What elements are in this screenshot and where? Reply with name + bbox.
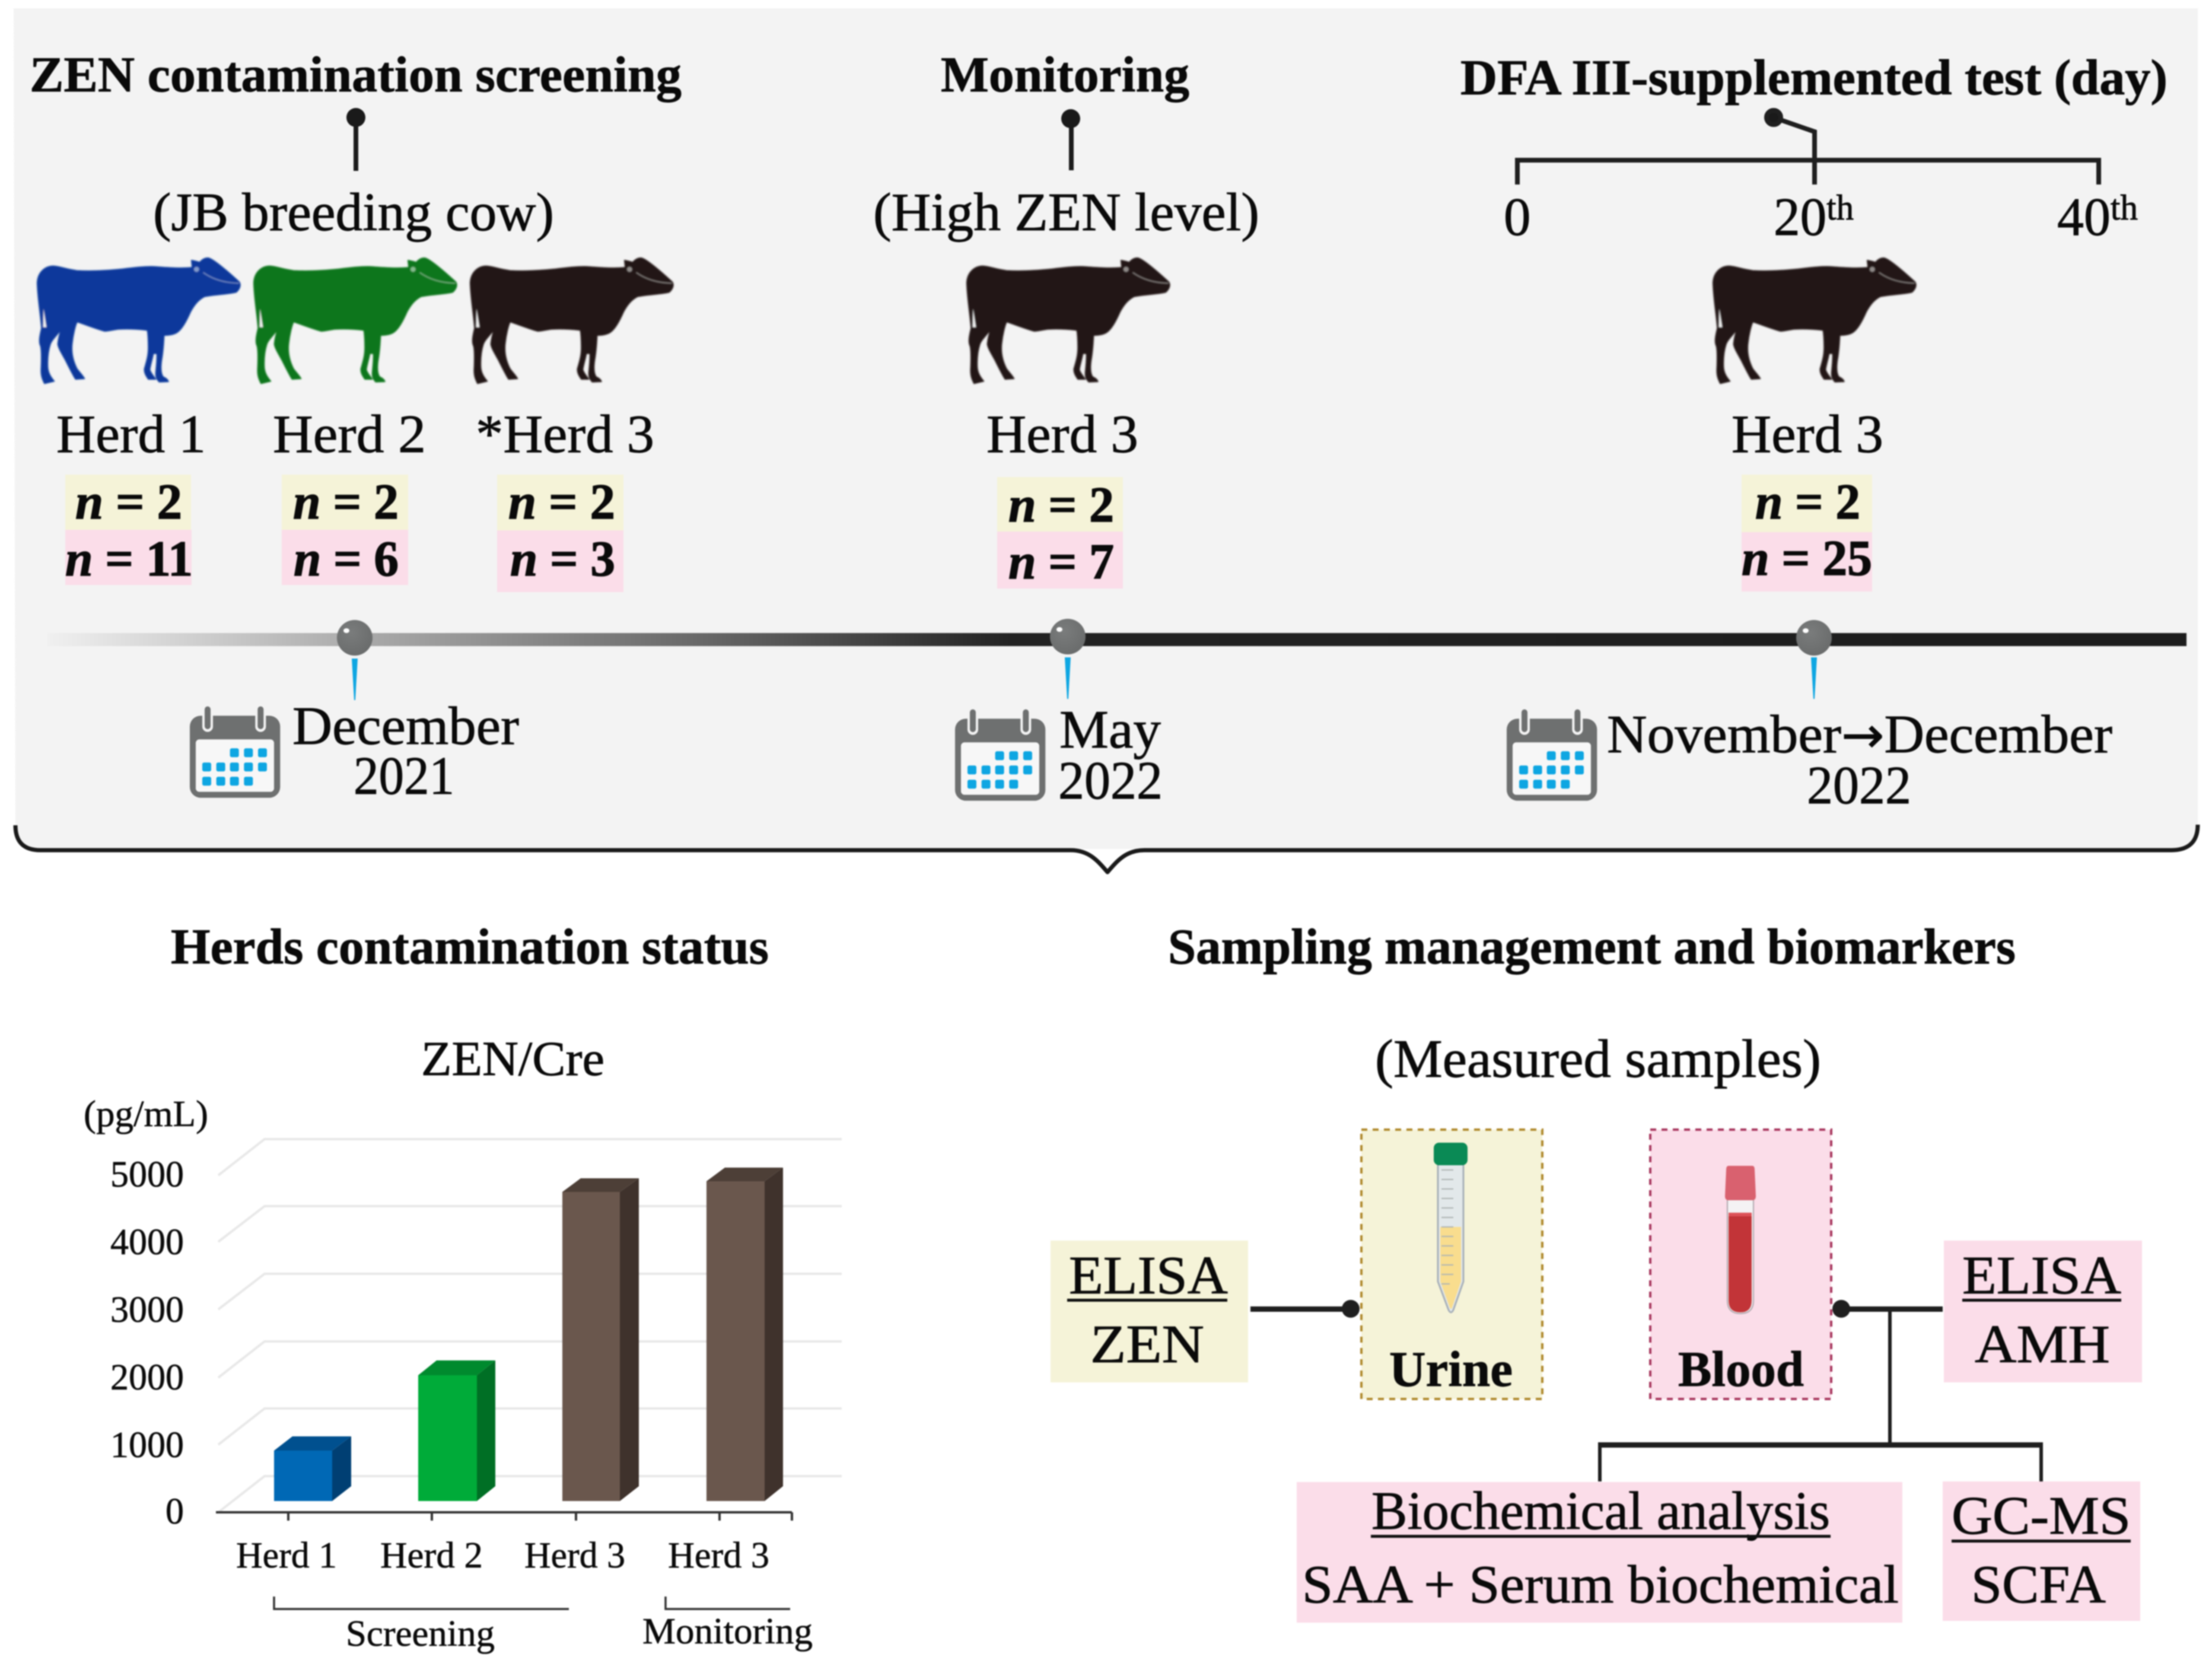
label: day 40: 40 bbox=[2057, 187, 2111, 247]
icon: urine tube bbox=[1434, 1143, 1468, 1312]
date: May 2022: May bbox=[1059, 699, 1161, 759]
bar: Herd 3 screening bbox=[562, 1178, 639, 1501]
day scale bracket bbox=[1517, 110, 2099, 185]
heading: DFA III test: DFA III-supplemented test (day) bbox=[1460, 50, 2168, 106]
category labels: Herd 3 bbox=[524, 1535, 625, 1576]
sample counts: Herd 3 screening: n = 3 bbox=[510, 531, 615, 587]
marker: May 2022 bbox=[1050, 619, 1086, 699]
label: day 20: th bbox=[1826, 188, 1854, 227]
box: GC-MS SCFA bbox=[1943, 1481, 2140, 1621]
bar: Herd 2 bbox=[418, 1360, 495, 1501]
chart title: ZEN/Cre bbox=[421, 1031, 604, 1086]
date: December 2021: December bbox=[292, 696, 519, 756]
label: Herd 1: Herd 1 bbox=[56, 404, 206, 464]
box: Biochemical analysis: Biochemical analysis bbox=[1371, 1481, 1830, 1541]
sample counts: Herd 1 bbox=[65, 474, 193, 587]
sample counts: monitoring: n = 7 bbox=[1008, 534, 1114, 590]
label: day 0: 0 bbox=[1504, 187, 1530, 247]
panel: timeline background bbox=[14, 8, 2198, 849]
sample counts: Herd 2 bbox=[282, 474, 408, 587]
sample counts: test: n = 25 bbox=[1742, 530, 1872, 586]
sample counts: Herd 1: n = 11 bbox=[65, 531, 193, 587]
pin: monitoring bbox=[1061, 109, 1080, 170]
icon: blue cow bbox=[37, 258, 240, 384]
label: Herd 2: Herd 2 bbox=[273, 404, 426, 464]
group bracket: screening bbox=[274, 1597, 569, 1654]
label: Herd 3 monitoring: Herd 3 bbox=[986, 404, 1138, 464]
panel: urine sample bbox=[1361, 1130, 1542, 1399]
date: November to December 2022: November→December bbox=[1607, 704, 2112, 764]
date: November to December 2022 bbox=[1607, 704, 2112, 815]
sample counts: Herd 1: n = 2 bbox=[75, 474, 182, 530]
group bracket: monitoring: Monitoring bbox=[642, 1611, 813, 1652]
label: *Herd 3: *Herd 3 bbox=[476, 404, 654, 464]
sample counts: Herd 3 screening: n = 2 bbox=[508, 474, 615, 530]
date: May 2022 bbox=[1058, 699, 1163, 810]
icon: calendar 3 bbox=[1507, 707, 1597, 801]
panel: urine sample: Urine bbox=[1389, 1341, 1513, 1397]
icon: green cow bbox=[254, 258, 457, 384]
category labels: Herd 2 bbox=[380, 1535, 483, 1576]
sample counts: monitoring bbox=[997, 477, 1123, 590]
box: Biochemical analysis bbox=[1297, 1481, 1902, 1623]
marker: November to December 2022 bbox=[1796, 620, 1832, 699]
date: May 2022: 2022 bbox=[1058, 751, 1163, 810]
box: Biochemical analysis: SAA + Serum biochemical bbox=[1302, 1554, 1899, 1614]
date: December 2021 bbox=[292, 696, 519, 806]
box: ELISA AMH: ELISA bbox=[1962, 1245, 2121, 1305]
brace under timeline panel bbox=[15, 825, 2198, 872]
box: ELISA AMH bbox=[1944, 1241, 2142, 1382]
y axis ticks: 5000 bbox=[110, 1155, 184, 1195]
text: JB breeding cow: (JB breeding cow) bbox=[153, 182, 554, 242]
timeline bar bbox=[47, 633, 2186, 646]
icon: brown cow bbox=[470, 258, 673, 384]
sample counts: test bbox=[1742, 474, 1872, 592]
icon: calendar 1 bbox=[190, 704, 280, 798]
connector: ELISA ZEN to urine bbox=[1250, 1300, 1360, 1318]
sample counts: Herd 2: n = 6 bbox=[294, 531, 399, 587]
y axis ticks: 2000 bbox=[110, 1357, 184, 1398]
marker: December 2021 bbox=[337, 620, 373, 700]
panel: blood sample bbox=[1650, 1130, 1831, 1399]
heading: Herds contamination status: Herds contamination status bbox=[171, 919, 769, 975]
heading: Monitoring: Monitoring bbox=[941, 47, 1189, 103]
connector: blood to assays bbox=[1598, 1300, 2043, 1481]
y axis ticks bbox=[110, 1155, 184, 1532]
heading: ZEN contamination screening: ZEN contamination screening bbox=[30, 47, 682, 103]
x axis bbox=[216, 1512, 792, 1521]
text: Measured samples: (Measured samples) bbox=[1375, 1029, 1821, 1089]
box: ELISA AMH: AMH bbox=[1975, 1314, 2110, 1374]
y axis ticks: 1000 bbox=[110, 1425, 184, 1465]
text: High ZEN level: (High ZEN level) bbox=[873, 182, 1259, 242]
box: GC-MS SCFA: SCFA bbox=[1971, 1554, 2106, 1614]
box: ELISA ZEN: ZEN bbox=[1090, 1314, 1204, 1374]
bar chart: ZEN/Cre bbox=[84, 1031, 842, 1654]
group bracket: screening: Screening bbox=[346, 1614, 495, 1654]
box: ELISA ZEN bbox=[1051, 1241, 1248, 1382]
bar: Herd 1 bbox=[274, 1436, 351, 1501]
category labels: Herd 1 bbox=[236, 1535, 337, 1576]
icon: calendar 2 bbox=[955, 707, 1045, 801]
box: GC-MS SCFA: GC-MS bbox=[1952, 1486, 2131, 1546]
y axis ticks: 4000 bbox=[110, 1222, 184, 1263]
y axis ticks: 0 bbox=[165, 1492, 184, 1532]
pin: screening bbox=[346, 108, 365, 171]
category labels: Herd 3 bbox=[668, 1535, 769, 1576]
heading: Sampling management and biomarkers: Sampling management and biomarkers bbox=[1168, 919, 2016, 975]
date: November to December 2022: 2022 bbox=[1807, 755, 1911, 815]
date: December 2021: 2021 bbox=[354, 746, 454, 806]
y axis ticks: 3000 bbox=[110, 1290, 184, 1330]
icon: blood tube bbox=[1725, 1166, 1756, 1314]
unit label: (pg/mL) bbox=[84, 1094, 208, 1134]
label: day 40: th bbox=[2111, 188, 2138, 227]
bar: Herd 3 monitoring bbox=[706, 1168, 783, 1501]
sample counts: monitoring: n = 2 bbox=[1008, 477, 1114, 533]
label: day 20: 20 bbox=[1774, 187, 1828, 247]
panel: blood sample: Blood bbox=[1678, 1341, 1804, 1397]
box: ELISA ZEN: ELISA bbox=[1069, 1245, 1228, 1305]
icon: test cow bbox=[1713, 258, 1916, 384]
icon: monitoring cow bbox=[967, 258, 1170, 384]
category labels bbox=[236, 1535, 769, 1576]
sample counts: test: n = 2 bbox=[1755, 474, 1860, 530]
label: Herd 3 test: Herd 3 bbox=[1732, 404, 1883, 464]
sample counts: Herd 3 screening bbox=[497, 474, 623, 592]
sample counts: Herd 2: n = 2 bbox=[293, 474, 399, 530]
